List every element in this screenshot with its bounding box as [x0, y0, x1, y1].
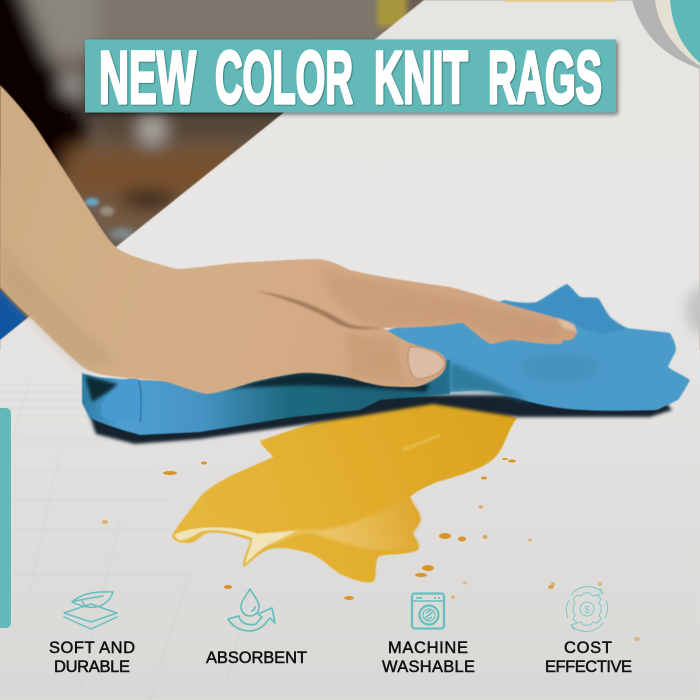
label: ABSORBENT	[206, 649, 307, 667]
sheen	[403, 435, 440, 450]
hand shape	[0, 85, 577, 394]
icon: washing machine	[412, 594, 444, 628]
hand and arm	[0, 85, 577, 394]
spill body	[172, 402, 517, 582]
title words: COLOR	[215, 36, 353, 119]
feature: soft and durable	[49, 592, 135, 676]
thumb nail	[408, 347, 445, 379]
label: COST	[564, 639, 612, 657]
teal tab on left edge	[0, 408, 11, 628]
title words: RAGS	[488, 36, 602, 119]
oil droplets	[102, 458, 640, 641]
feature: absorbent	[206, 589, 307, 667]
icon: water drop with arrow	[228, 589, 275, 631]
thumb shading	[345, 332, 405, 383]
title banner	[85, 36, 616, 119]
label: SOFT AND	[49, 639, 135, 657]
title bar	[85, 40, 616, 112]
blurred room behind table	[0, 0, 700, 350]
table weave texture	[0, 380, 300, 700]
finger nail highlight	[556, 318, 577, 332]
icon: leaf on layers	[64, 592, 117, 629]
title words	[99, 36, 602, 119]
feature: machine washable	[382, 594, 475, 676]
rag fold seam	[139, 380, 141, 422]
rag shadow	[86, 395, 672, 444]
light spill rim	[174, 527, 297, 564]
oil spill	[102, 402, 640, 641]
rag bluish shadow patch	[450, 362, 530, 402]
label: MACHINE	[388, 639, 468, 657]
label: EFFECTIVE	[545, 658, 632, 676]
knuckle shading	[320, 268, 557, 338]
rag top patch	[505, 286, 627, 334]
rag mid tone patch	[518, 354, 602, 382]
icon: gear with dollar sign: $	[584, 605, 590, 616]
title words: NEW	[99, 36, 196, 119]
rag right section	[383, 284, 690, 411]
warm far edge of table	[505, 0, 615, 2]
light lower lobe	[256, 497, 420, 550]
label: WASHABLE	[382, 658, 475, 676]
grey arc	[632, 0, 700, 69]
arm lower edge shading	[0, 240, 120, 367]
feature: cost effective	[545, 587, 632, 676]
corner decoration	[632, 0, 700, 69]
cream arc	[655, 0, 700, 66]
rag dark top shadow	[85, 373, 430, 402]
crease under fingers	[255, 291, 383, 329]
title words: KNIT	[374, 36, 468, 119]
label: DURABLE	[54, 658, 130, 676]
teal circle	[670, 0, 700, 63]
rag left section	[82, 360, 450, 435]
soft grey blur at right edge	[686, 286, 700, 334]
rag left fold	[100, 378, 141, 421]
blue knit rag	[82, 284, 690, 444]
